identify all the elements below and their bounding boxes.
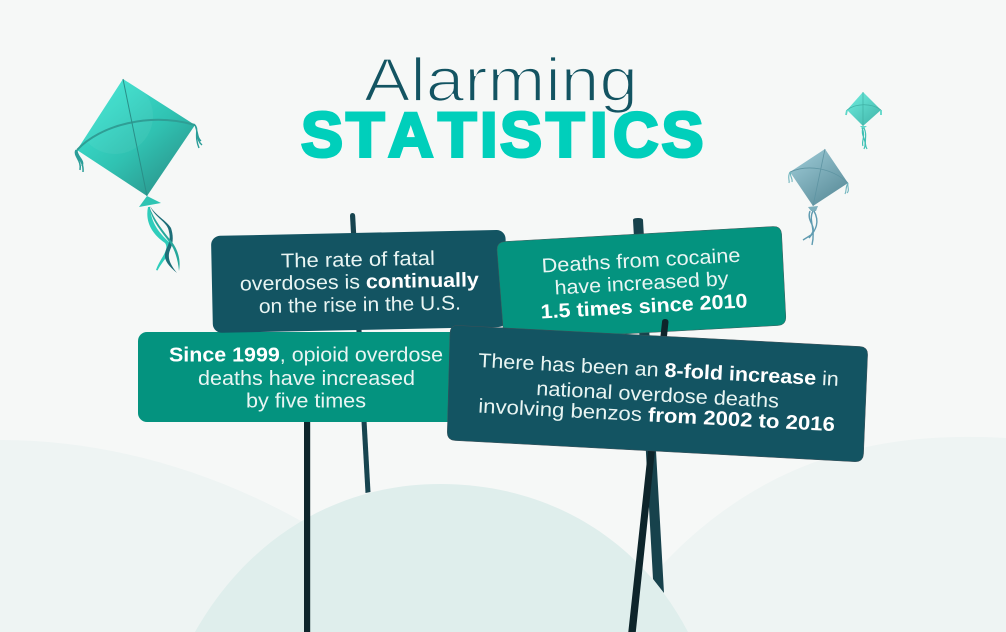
- centre hill: [195, 484, 688, 632]
- sign text: have increased by: [554, 268, 729, 299]
- sign text: The rate of fatal: [281, 248, 435, 272]
- kite: small blue: [789, 149, 848, 245]
- sign text: Since 1999 , opioid overdose: [169, 344, 443, 366]
- title: [301, 46, 704, 170]
- back post: right sign: [633, 218, 664, 593]
- left hill: [0, 440, 320, 632]
- title word: Alarming: Alarming: [364, 46, 638, 114]
- sign text: There has been an 8-fold increase in: [478, 350, 839, 391]
- title word: STATISTICS: STATISTICS: [301, 100, 704, 170]
- front post: left sign: [304, 415, 310, 632]
- back post: left sign: [350, 213, 370, 493]
- front post: right sign: [628, 319, 668, 632]
- sign: opioid deaths: [138, 332, 468, 422]
- sign text: on the rise in the U.S.: [259, 292, 461, 318]
- sign text: [478, 350, 839, 436]
- sign text: [240, 248, 480, 318]
- sign text: involving benzos from 2002 to 2016: [478, 396, 835, 436]
- sign text: [540, 245, 748, 323]
- kite: small teal: [846, 92, 881, 149]
- sign: cocaine deaths: [497, 226, 786, 340]
- sign text: by five times: [246, 390, 366, 412]
- sign text: overdoses is continually: [240, 269, 480, 295]
- kite: large teal: [75, 78, 202, 273]
- sign text: 1.5 times since 2010: [540, 290, 748, 323]
- sign: fatal overdoses: [211, 230, 507, 333]
- sign: benzo deaths: [447, 325, 868, 462]
- sign text: Deaths from cocaine: [541, 245, 741, 277]
- sign text: national overdose deaths: [536, 378, 780, 413]
- sign text: deaths have increased: [198, 368, 415, 390]
- right hill: [640, 437, 1006, 632]
- sign text: [169, 344, 443, 412]
